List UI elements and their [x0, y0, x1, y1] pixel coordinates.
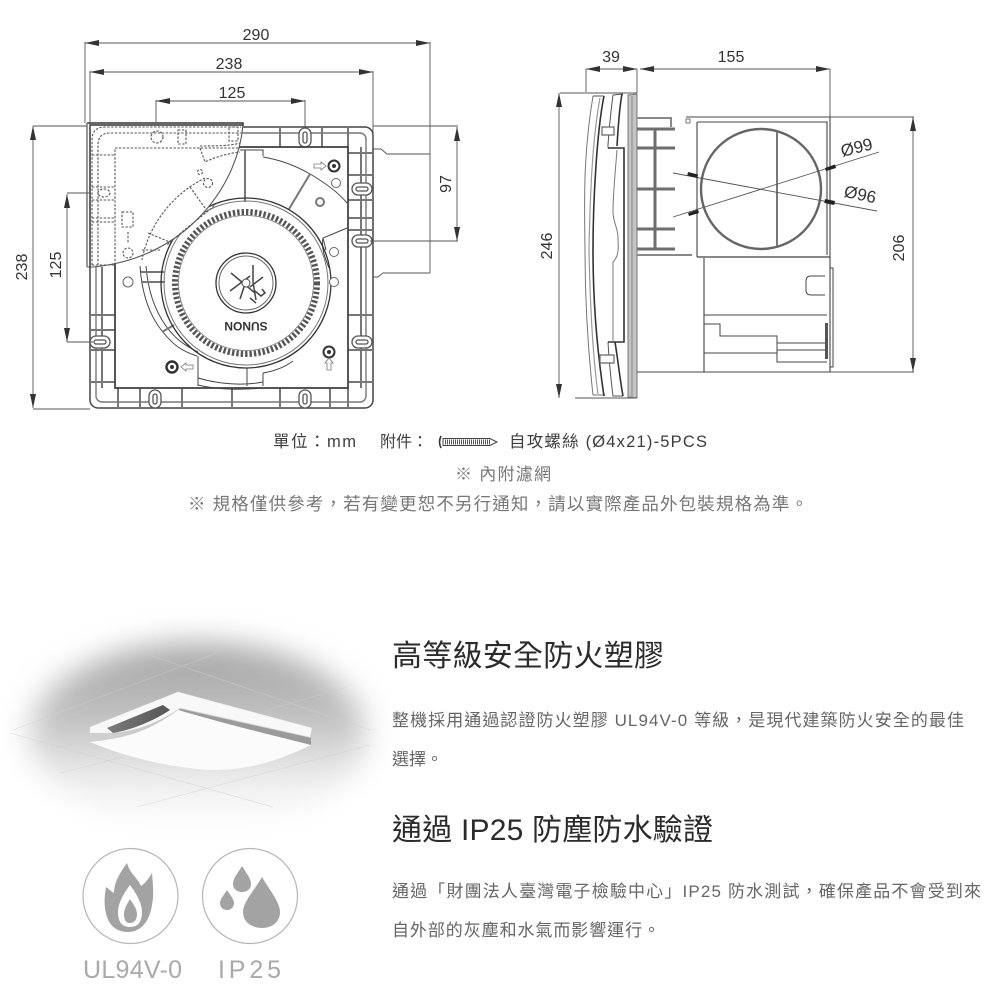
body: IP25: [392, 882, 981, 940]
label 206: 206: [891, 235, 908, 261]
top line: [560, 93, 637, 398]
ceiling grid: [10, 652, 370, 807]
impeller teeth: [175, 212, 317, 354]
screws: [123, 160, 340, 372]
heading: fire resistant: 高等級安全防火塑膠: [392, 640, 664, 673]
label 39: 39: [602, 49, 620, 66]
fan hub: [216, 253, 276, 313]
badge label: IP25: [218, 956, 281, 984]
accessory label: 附件：: [380, 433, 428, 451]
duct body: [637, 118, 830, 257]
screw text: 自攻螺絲 (Ø4x21)-5PCS: [509, 432, 707, 451]
dimension lines side: [539, 49, 914, 398]
unit text: 單位：mm: [273, 432, 356, 451]
icon: large drop: [243, 877, 280, 928]
heading: IP25: 通過 IP25 防塵防水驗證: [392, 814, 713, 847]
duct circle: [701, 129, 821, 249]
grille: [637, 129, 675, 249]
icon: screw: [440, 436, 497, 448]
note: filter: ※ 內附濾網: [455, 465, 551, 484]
vent cover: [90, 710, 311, 770]
vent plate: [90, 692, 312, 737]
label 155: 155: [718, 49, 744, 66]
vent shadow: [180, 709, 311, 745]
box lower details: [704, 315, 827, 362]
note: disclaimer: ※ 規格僅供參考，若有變更恕不另行通知，請以實際產品外包裝規格為準。: [188, 494, 808, 514]
frame ribs: [90, 127, 373, 408]
hub logo: [230, 265, 265, 303]
label 238 vertical: 238: [14, 254, 31, 280]
label 290: 290: [243, 27, 269, 44]
icon: flame: [105, 863, 153, 932]
label 238: 238: [216, 56, 242, 73]
diameter lines: [673, 173, 877, 211]
badge label: UL94V-0: [83, 956, 182, 984]
inner square plate: [115, 147, 348, 388]
product photo: [10, 643, 370, 827]
front view drawing: [87, 123, 373, 408]
gradient backdrop: [30, 643, 366, 827]
label 125: 125: [219, 85, 245, 102]
label 97: 97: [438, 175, 455, 193]
body: fire resistant: [392, 711, 964, 769]
badge: IP25: [202, 848, 298, 984]
label 125 vertical: 125: [48, 252, 65, 278]
body: fire resistant: 整機採用通過認證防火塑膠 UL94V-0 等級，是現代建築防火安全的最佳: [392, 711, 964, 730]
frame outer: [90, 127, 373, 408]
body: fire resistant: 選擇。: [392, 750, 443, 769]
logo text: SUNON: [224, 319, 268, 333]
slot holes: [90, 128, 372, 408]
icon: medium drop: [233, 866, 251, 892]
scroll housing: [140, 150, 347, 389]
connectors: [600, 127, 614, 363]
label diameter 99: Ø99: [839, 135, 875, 161]
icon: small drop: [220, 890, 234, 910]
unit and accessory line: [273, 432, 707, 451]
body: IP25: 自外部的灰塵和水氣而影響運行。: [392, 921, 660, 940]
dashed overlay quarter: [87, 123, 243, 267]
body: IP25: 通過「財團法人臺灣電子檢驗中心」IP25 防水測試，確保產品不會受到來: [392, 882, 981, 901]
dimension lines front: [14, 27, 458, 409]
badge: UL94V-0: [83, 848, 182, 984]
flange: [628, 94, 637, 398]
fan outer ring: [161, 198, 331, 368]
curved cover: [585, 96, 605, 395]
side view drawing: [560, 93, 879, 398]
label 246: 246: [539, 233, 556, 259]
label diameter 96: Ø96: [842, 182, 878, 207]
